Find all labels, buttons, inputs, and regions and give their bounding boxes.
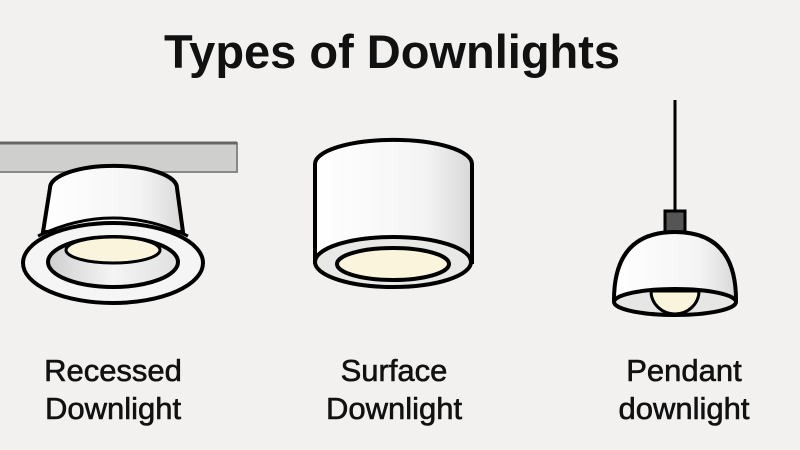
label: pendant	[618, 353, 750, 426]
label: recessed: Downlight	[45, 391, 181, 426]
label: recessed	[44, 353, 182, 426]
icon: surface downlight	[315, 140, 472, 287]
icon: recessed downlight	[0, 143, 237, 303]
label: surface: Surface	[341, 353, 447, 388]
label: recessed: Recessed	[44, 353, 182, 388]
icon: pendant downlight	[614, 100, 736, 315]
label: surface: Downlight	[326, 391, 462, 426]
label: surface	[326, 353, 462, 426]
title: Types of Downlights	[164, 25, 620, 78]
label: pendant: downlight	[618, 391, 749, 426]
label: pendant: Pendant	[626, 353, 742, 388]
